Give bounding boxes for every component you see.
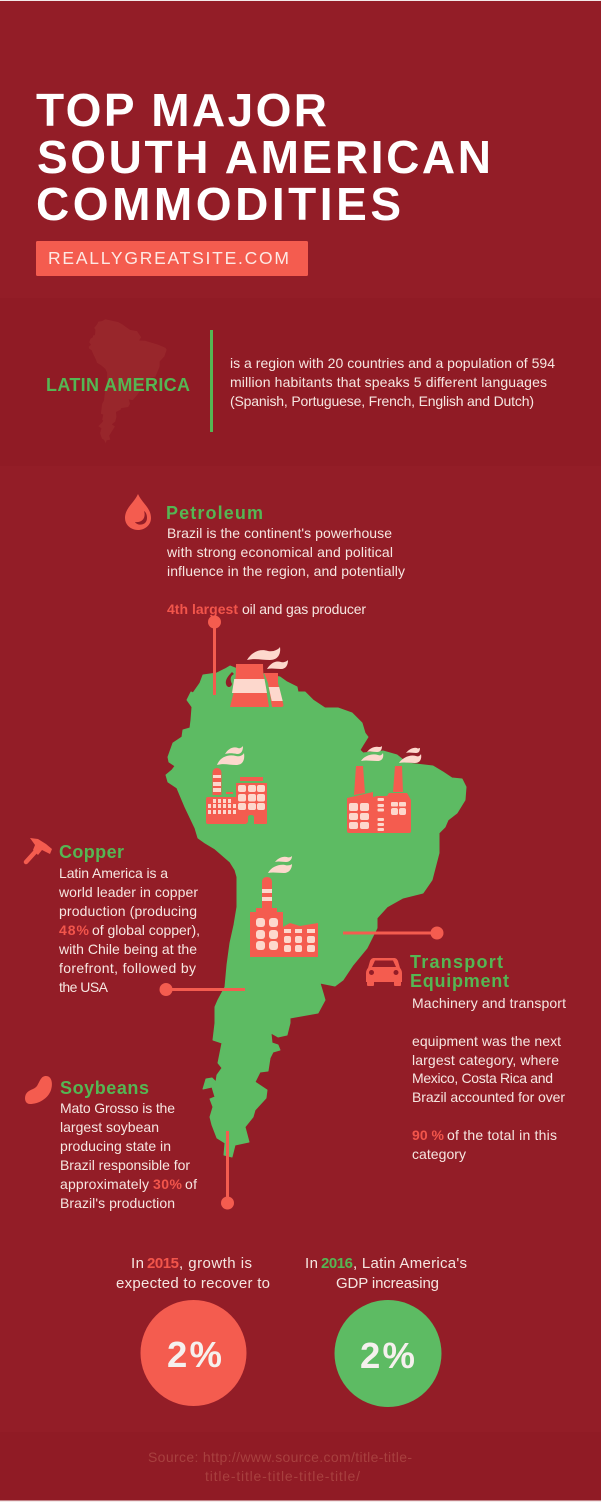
2016 caption [305,1255,467,1292]
intro text: is a region with 20 countries and a population of 594 [230,355,555,371]
icon: factory center [250,856,318,957]
Copper text: of global copper), [92,922,200,938]
stat circle: 2% [140,1300,246,1406]
website button [36,241,308,276]
icon: cooling towers [230,647,288,707]
connector: Copper [160,983,245,996]
title: COMMODITIES [36,178,401,230]
2015 caption: In [131,1255,144,1272]
2016 caption: GDP increasing [336,1275,439,1292]
Copper text: Latin America is a [59,865,168,881]
heading: Latin America: LATIN AMERICA [46,375,190,395]
panel: Transport Equipment [366,952,566,1162]
heading: Transport Equipment: Equipment [410,971,509,991]
Transport text: category [412,1146,466,1162]
Soybeans text: Mato Grosso is the [60,1100,175,1116]
Copper text: production (producing [59,903,197,919]
panel: Copper [26,838,200,995]
Petroleum text: Brazil is the continent's powerhouse [167,525,392,541]
panel: Latin America intro [46,319,555,443]
Soybeans text: approximately [60,1176,149,1192]
heading: Soybeans: Soybeans [60,1078,149,1098]
2015 caption: , growth is [179,1255,252,1272]
heading: Transport Equipment: Transport [410,952,503,972]
2015 caption: 2015 [147,1255,179,1272]
Transport text: 90 % [412,1127,445,1143]
Soybeans text: Brazil responsible for [60,1157,190,1173]
stat circle: 2% [334,1300,442,1407]
Soybeans text: Brazil's production [60,1195,175,1211]
icon: faint South America map [89,319,167,443]
heading: Petroleum: Petroleum [166,503,263,523]
icon: soybean [25,1076,52,1104]
2016 caption: 2016 [321,1255,353,1272]
heading: Transport Equipment [410,952,509,991]
icon: oil drop [125,494,151,530]
intro text: (Spanish, Portuguese, French, English and Dutch) [230,393,534,409]
2015 caption: expected to recover to [116,1275,270,1292]
icon: factory right [347,746,421,833]
Transport text [412,995,566,1162]
Soybeans text: 30% [153,1176,183,1192]
Copper text: with Chile being at the [58,941,197,957]
Copper text: the USA [59,979,109,995]
Transport text: Machinery and transport [412,995,566,1011]
Copper text: world leader in copper [58,884,198,900]
title [36,84,491,230]
Transport text: Mexico, Costa Rica and [412,1070,553,1086]
title: SOUTH AMERICAN [37,131,491,183]
Transport text: of the total in this [447,1127,557,1143]
icon: hammer [26,838,52,862]
intro text: million habitants that speaks 5 different languages [230,374,547,390]
panel: Petroleum [125,494,405,617]
Transport text: Brazil accounted for over [412,1089,565,1105]
website button: REALLYGREATSITE.COM [48,248,289,268]
Transport text: largest category, where [412,1052,559,1068]
source note: title-title-title-title-title/ [205,1468,360,1484]
map: South America [166,666,466,1157]
icon: factory left [206,746,267,824]
title: TOP MAJOR [36,84,327,136]
2016 caption: , Latin America's [353,1255,467,1272]
Petroleum text: 4th largest [167,601,238,617]
icon: car [366,958,402,986]
Soybeans text: producing state in [60,1138,171,1154]
2015 caption [116,1255,270,1292]
connector: Soybeans [221,1131,234,1210]
divider bar [210,330,213,432]
stat circle: 2%: 2% [167,1334,222,1375]
Copper text: forefront, followed by [59,960,196,976]
Petroleum text: with strong economical and political [166,544,393,560]
source note: Source: http://www.source.com/title-title- [148,1449,412,1465]
Copper text [58,865,200,995]
panel: Soybeans [25,1076,197,1211]
Soybeans text [60,1100,197,1211]
Petroleum text: influence in the region, and potentially [167,563,405,579]
Petroleum text: oil and gas producer [242,601,366,617]
connector: Petroleum [208,616,221,695]
Copper text: 48% [59,922,90,938]
panel: 2015 growth [116,1255,270,1406]
intro text [230,355,555,409]
connector: Transport [343,926,444,940]
Transport text: equipment was the next [412,1033,561,1049]
stat circle: 2%: 2% [360,1335,415,1376]
heading: Copper: Copper [59,842,124,862]
panel: 2016 GDP [305,1255,467,1407]
source note [148,1449,412,1484]
2016 caption: In [305,1255,318,1272]
Soybeans text: largest soybean [60,1119,159,1135]
Petroleum text [166,525,405,617]
Soybeans text: of [185,1176,197,1192]
